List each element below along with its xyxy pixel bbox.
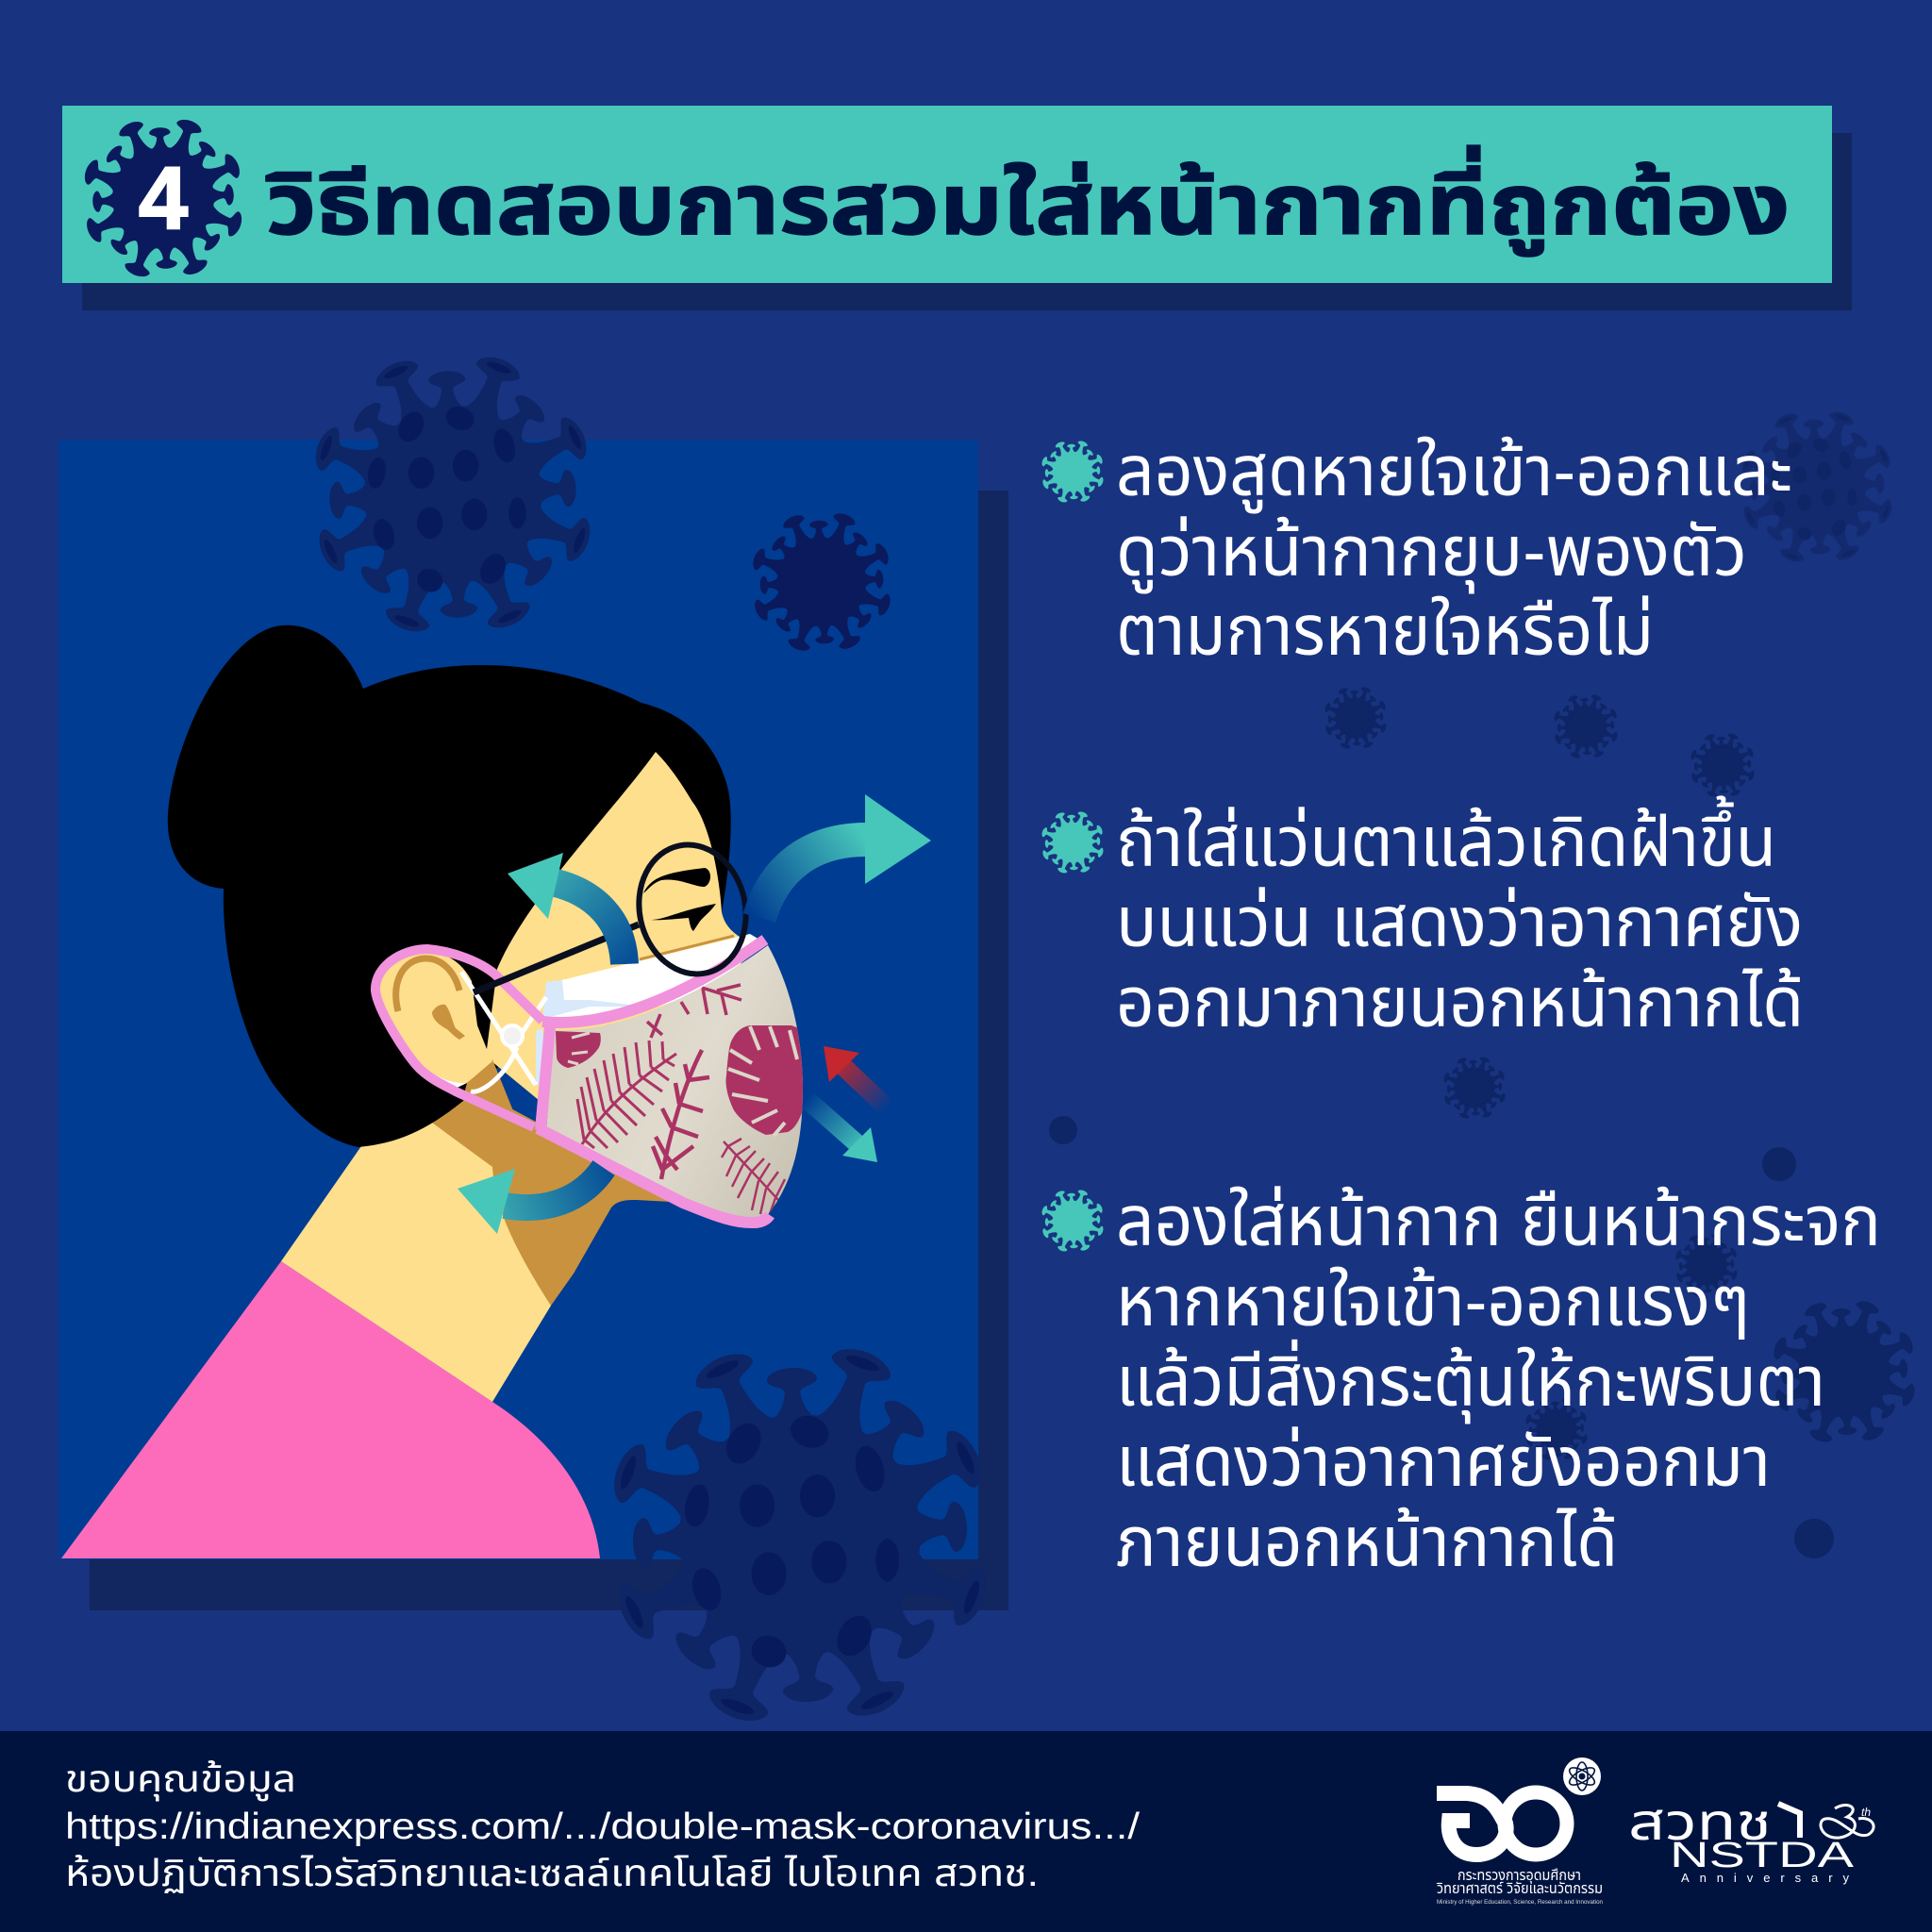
arrow: red inhale [824,1046,888,1108]
30th anniversary swirl [1821,1805,1874,1838]
nose shadow line [640,936,734,959]
arrow: exhale toward temple [508,853,625,964]
icon: atom [1563,1757,1601,1795]
text block: tip 3: หากหายใจเข้า-ออกแรงๆ [1116,1262,1750,1341]
bullet icon [1041,1189,1105,1253]
icon: virus number 4 [80,115,246,281]
bullet icon [1041,440,1105,504]
text block: tip 3 [1041,1182,1881,1581]
text block: tip 3: แสดงว่าอากาศยังออกมา [1116,1423,1771,1501]
credits text: ห้องปฏิบัติการไวรัสวิทยาและเซลล์เทคโนโลยี ไบโอเทค สวทช. [65,1854,1039,1894]
text block: tip 1: ดูว่าหน้ากากยุบ-พองตัว [1116,512,1747,593]
logo: ministry [1436,1757,1603,1906]
eyebrow [643,868,710,893]
bullet icon [1041,810,1105,874]
glasses [474,835,758,992]
logo: NSTDA: Anniversary [1681,1871,1849,1885]
small monstera leaf [556,1031,601,1068]
palm frond [577,1041,676,1148]
credits text [65,1759,1140,1894]
ear [377,951,514,1113]
illustration panel shadow [90,491,1008,1610]
background virus: large top [308,350,597,639]
white ear straps [461,972,546,1091]
text block: tip 3: แล้วมีสิ่งกระตุ้นให้กะพริบตา [1116,1339,1825,1424]
eye [651,904,716,931]
logo: ministry: กระทรวงการอุดมศึกษา [1457,1868,1581,1884]
text block: tip 3: ลองใส่หน้ากาก ยืนหน้ากระจก [1116,1182,1881,1260]
neck shadow [432,1085,689,1306]
logo: NSTDA: th [1861,1806,1871,1819]
text block: tip 2: ออกมาภายนอกหน้ากากได้ [1116,963,1804,1041]
logo: NSTDA: สวทช [1628,1794,1772,1851]
arrow: teal exhale [807,1099,877,1162]
background virus: dark small in panel [749,509,894,655]
icon: virus number 4: 4 [139,148,188,247]
bottom right palm frond [722,1139,785,1214]
big monstera leaf [725,1025,807,1136]
text block: tip 2: ถ้าใส่แว่นตาแล้วเกิดฝ้าขึ้น [1116,795,1776,881]
face [486,752,745,1123]
title text: วิธีทดสอบการสวมใส่หน้ากากที่ถูกต้อง [265,145,1790,257]
footer [0,1731,1932,1932]
illustration panel [58,440,978,1559]
neck [281,1104,566,1402]
credits text: ขอบคุณข้อมูล [65,1759,296,1801]
fern frond [653,1050,709,1179]
title banner [62,106,1832,283]
logo: ministry: Ministry of Higher Education, Science, Research and Innovation [1437,1899,1603,1906]
logo: NSTDA [1628,1794,1874,1885]
text block: tip 3: ภายนอกหน้ากากได้ [1116,1503,1618,1581]
inner white mask [536,934,766,1085]
background virus: right top faint [1738,408,1896,566]
background viruses: small scattered [1049,686,1919,1558]
logo: NSTDA: NSTDA [1670,1836,1855,1875]
text block: tip 1: ตามการหายใจหรือไม่ [1116,591,1654,670]
top fern frond [647,985,741,1038]
arrow: exhale top right [759,794,931,918]
header shadow [82,133,1852,310]
illustration: woman wearing mask [61,625,807,1558]
text block: tip 2: บนแว่น แสดงว่าอากาศยัง [1116,883,1803,961]
text block: tip 1 [1041,432,1792,670]
mask body [546,945,803,1224]
background virus: large bottom [604,1339,996,1731]
hair [168,625,731,1147]
arrow: exhale toward neck [458,1168,604,1234]
credits text: https://indianexpress.com/.../double-mask-coronavirus.../ [65,1807,1140,1847]
text block: tip 2 [1041,795,1804,1041]
text block: tip 1: ลองสูดหายใจเข้า-ออกและ [1116,432,1792,513]
mask leaf pattern [556,985,807,1214]
pink ear loop [375,949,542,1127]
mask pink trim [538,940,770,1223]
shirt [61,1261,600,1558]
logo: ministry: วิทยาศาสตร์ วิจัยและนวัตกรรม [1436,1881,1603,1897]
